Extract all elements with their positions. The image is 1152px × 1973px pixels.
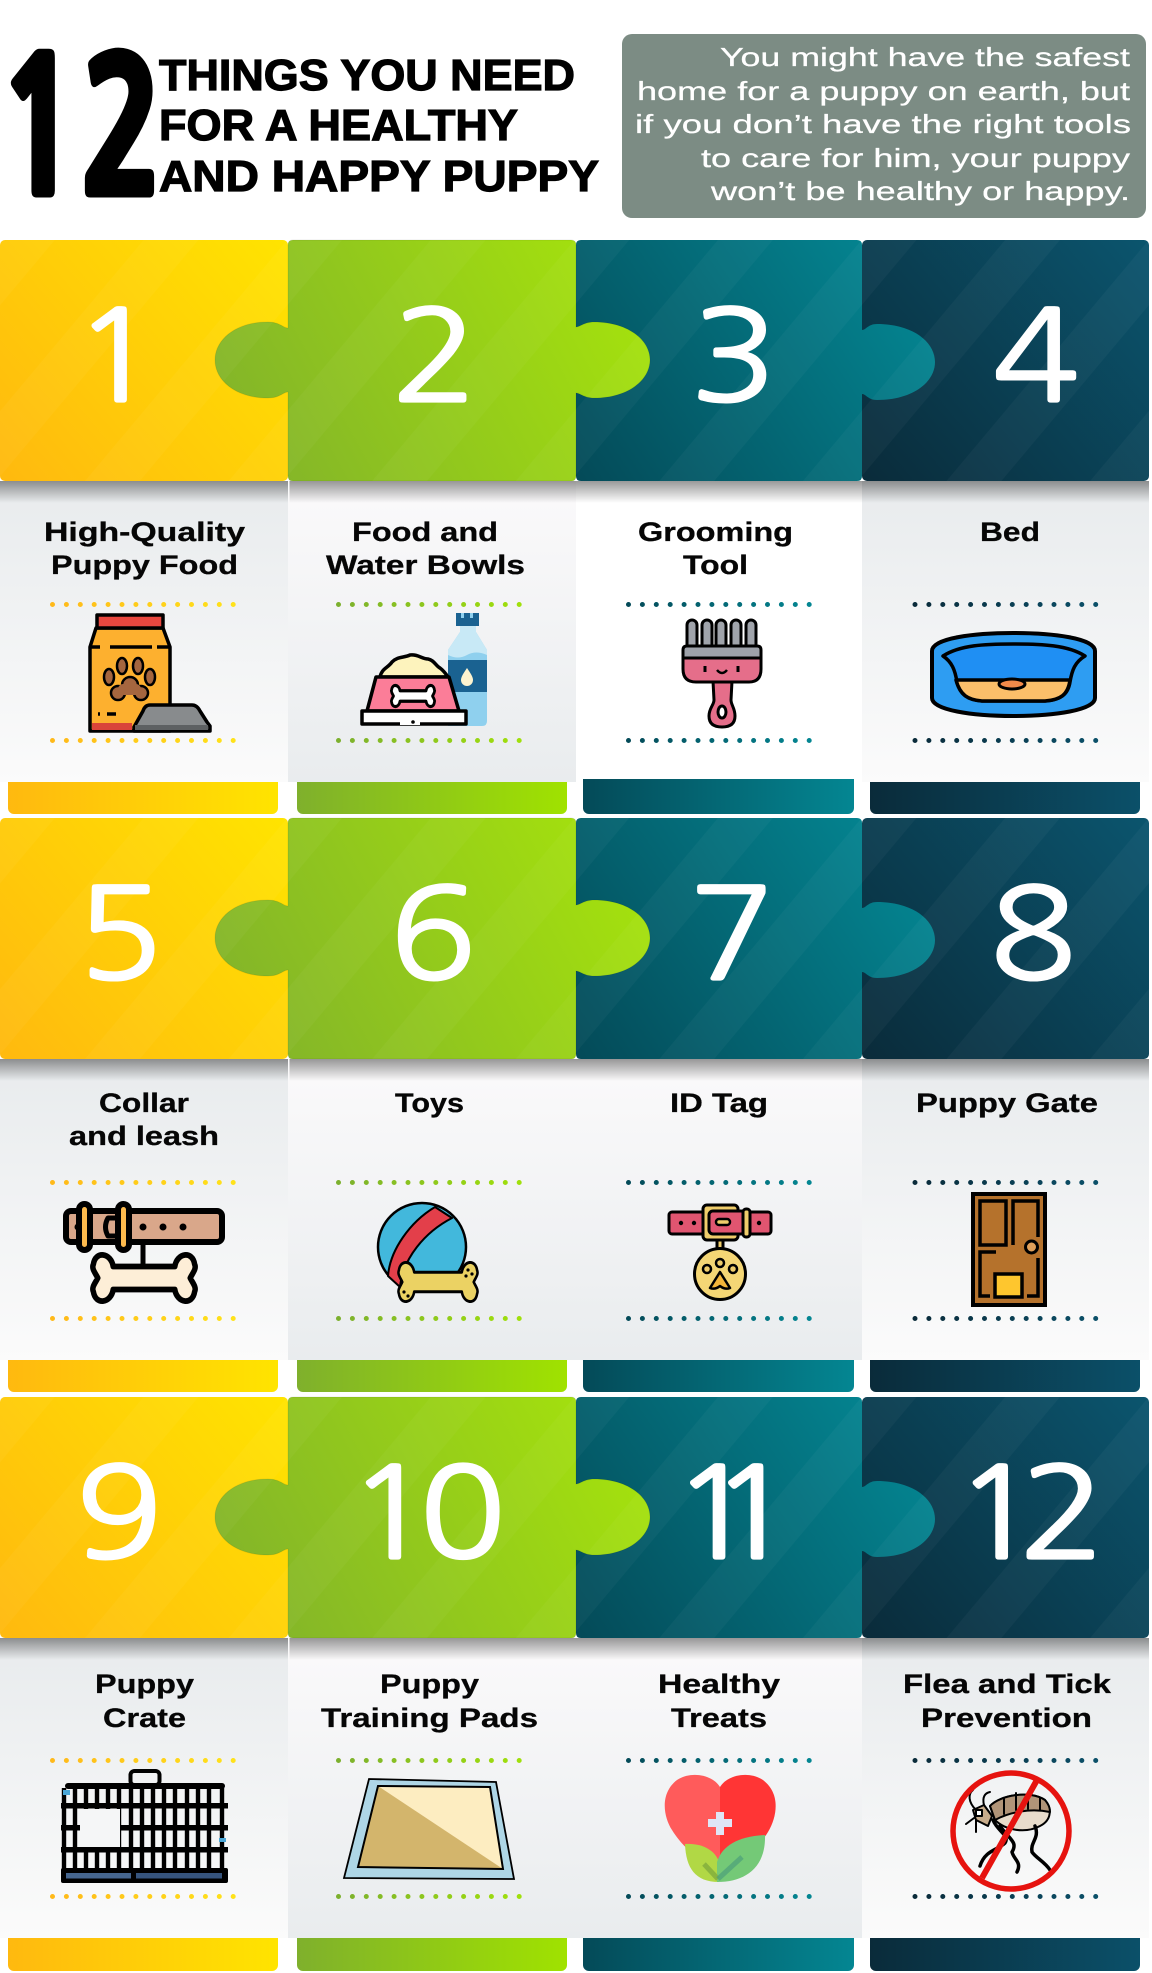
panel: item 10 puppy training pads: [288, 1638, 576, 1971]
heading: [69, 1088, 219, 1151]
heading: and leash: [69, 1121, 219, 1151]
dotted dividers: [52, 1182, 235, 1318]
icon: dog bed: [932, 633, 1095, 716]
heading: Water Bowls: [326, 550, 525, 580]
heading: Puppy: [380, 1669, 479, 1699]
panel: item 8 puppy gate: [862, 1059, 1149, 1392]
heading: [321, 1669, 538, 1733]
heading: Food and: [352, 517, 498, 547]
dotted dividers: [915, 604, 1097, 740]
heading: Tool: [683, 550, 748, 580]
icon: food bag and bowl: [90, 615, 210, 731]
panel: item 5 collar and leash: [0, 1059, 290, 1392]
number 6: 6: [389, 872, 477, 998]
intro callout: home for a puppy on earth, but: [637, 76, 1131, 106]
dotted dividers: [628, 1182, 811, 1318]
icon: collar with id tag: [669, 1205, 771, 1300]
dotted dividers: [52, 1760, 235, 1896]
panel: item 9 puppy crate: [0, 1638, 290, 1971]
heading: Puppy: [95, 1669, 194, 1699]
puzzle row 3: [0, 1397, 1149, 1638]
icon: door gate: [973, 1194, 1045, 1305]
heading: Grooming: [638, 517, 793, 547]
panel: item 11 healthy treats: [576, 1638, 862, 1971]
heading: Collar: [99, 1088, 190, 1118]
puzzle piece 5: [0, 818, 288, 1059]
puzzle piece 3: [576, 240, 935, 481]
heading: High-Quality: [44, 517, 245, 547]
dotted dividers: [52, 604, 235, 740]
puzzle piece 1: [0, 240, 288, 481]
puzzle piece 11: [576, 1397, 935, 1638]
dotted dividers: [338, 1182, 521, 1318]
title text: THINGS YOU NEED: [159, 51, 575, 100]
puzzle row 2: [0, 818, 1149, 1059]
icon: crate: [61, 1771, 228, 1883]
intro callout: if you don’t have the right tools: [635, 109, 1131, 139]
icon: heart with leaves: [665, 1775, 776, 1882]
number 1: 1: [72, 294, 160, 420]
puzzle piece 12: [862, 1397, 1149, 1638]
icon: food bowl and water bottle: [362, 613, 487, 726]
number 11: 11: [671, 1451, 762, 1577]
dotted dividers: [628, 604, 811, 740]
heading: Flea and Tick: [903, 1669, 1112, 1699]
panel: item 1 high-quality puppy food: [0, 481, 290, 814]
dotted dividers: [338, 604, 521, 740]
heading: Healthy: [658, 1669, 780, 1699]
icon: grooming brush: [683, 620, 761, 727]
title text: FOR A HEALTHY: [159, 101, 518, 150]
intro callout: to care for him, your puppy: [701, 143, 1130, 173]
puzzle piece 6: [215, 818, 650, 1059]
heading: Crate: [103, 1703, 186, 1733]
intro callout: [622, 34, 1146, 218]
dotted dividers: [915, 1182, 1097, 1318]
dotted dividers: [915, 1760, 1097, 1896]
heading: ID Tag: [670, 1088, 768, 1118]
panel: item 6 toys: [288, 1059, 576, 1392]
title: [0, 38, 599, 221]
heading: [638, 517, 793, 580]
number 12: 12: [954, 1451, 1093, 1577]
icon: collar and bone tag: [66, 1204, 222, 1301]
number 10: 10: [347, 1451, 499, 1577]
title text: AND HAPPY PUPPY: [159, 152, 599, 201]
heading: Bed: [980, 517, 1040, 547]
big number 12: 12: [0, 38, 164, 221]
heading: [95, 1669, 194, 1733]
number 5: 5: [76, 872, 164, 998]
heading: Toys: [395, 1088, 464, 1118]
puzzle piece 2: [215, 240, 650, 481]
puzzle piece 10: [215, 1397, 650, 1638]
heading: Training Pads: [321, 1703, 538, 1733]
title text: [159, 51, 599, 201]
puzzle piece 4: [862, 240, 1149, 481]
intro callout: won’t be healthy or happy.: [710, 176, 1130, 206]
panel: item 7 id tag: [576, 1059, 862, 1392]
number 9: 9: [75, 1451, 163, 1577]
heading: Treats: [671, 1703, 767, 1733]
number 3: 3: [690, 294, 778, 420]
icon: flea with prohibition sign: [953, 1773, 1069, 1889]
heading: [44, 517, 245, 580]
dotted dividers: [628, 1760, 811, 1896]
panel: item 4 bed: [862, 481, 1149, 814]
number 7: 7: [688, 872, 776, 998]
number 8: 8: [989, 872, 1077, 998]
panel: item 2 food and water bowls: [288, 481, 576, 814]
puzzle row 1: [0, 240, 1149, 481]
puzzle piece 9: [0, 1397, 288, 1638]
number 4: 4: [992, 294, 1080, 420]
icon: ball and bone: [378, 1203, 478, 1302]
heading: [903, 1669, 1112, 1733]
dotted dividers: [338, 1760, 521, 1896]
puzzle piece 7: [576, 818, 935, 1059]
icon: training pad: [344, 1779, 514, 1879]
heading: Puppy Gate: [916, 1088, 1098, 1118]
puzzle piece 8: [862, 818, 1149, 1059]
heading: [658, 1669, 780, 1733]
panel: item 12 flea and tick prevention: [862, 1638, 1149, 1971]
panel: item 3 grooming tool: [576, 481, 862, 814]
heading: Puppy Food: [51, 550, 238, 580]
number 2: 2: [391, 294, 479, 420]
heading: [326, 517, 525, 580]
intro callout: You might have the safest: [720, 42, 1131, 72]
heading: Prevention: [921, 1703, 1092, 1733]
